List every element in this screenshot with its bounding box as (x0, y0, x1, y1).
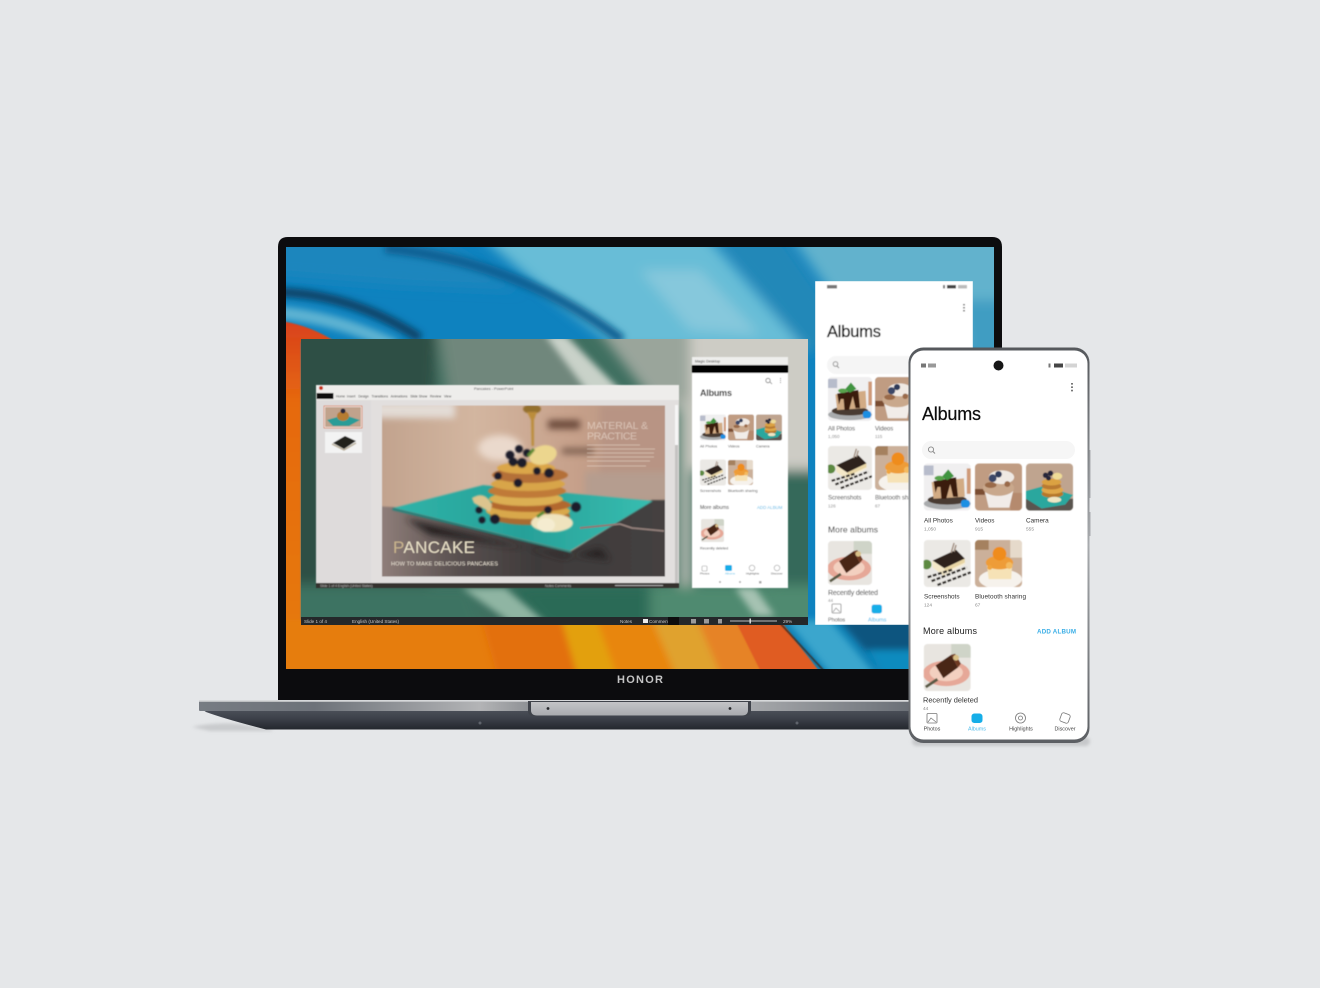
panel thumbnails (827, 376, 908, 586)
panel tab bar: Photos (828, 618, 845, 624)
mirrored tab bar: Albums (725, 572, 736, 576)
panel labels: Screenshots (828, 496, 861, 502)
slide heading right (587, 422, 648, 440)
desktop status bar: English (United States) (352, 619, 399, 624)
mirrored labels: Camera (756, 444, 770, 448)
mirrored labels: Videos (728, 444, 740, 448)
mirrored labels (700, 444, 783, 550)
brand logo: HONOR (617, 674, 663, 686)
table (372, 500, 670, 580)
phone thumbnails (922, 464, 1073, 691)
laptop base (199, 700, 911, 730)
panel labels: 126 (828, 504, 836, 508)
ppt status bar: Notes Comments (545, 584, 571, 588)
slide heading right: PRACTICE (587, 430, 637, 442)
panel labels: More albums (828, 524, 878, 534)
phone labels: 44 (923, 706, 929, 712)
mirrored phone window (692, 357, 788, 588)
panel heading: Albums (827, 323, 881, 341)
panel labels: 115 (875, 434, 883, 439)
phone labels: ADD ALBUM (1037, 628, 1076, 636)
desktop status bar (301, 617, 808, 625)
mirrored tab bar: Photos (700, 572, 710, 576)
laptop screen wallpaper (286, 247, 994, 669)
panel tab bar: Albums (868, 618, 887, 624)
panel labels: Videos (875, 426, 893, 432)
mirrored thumbnails (699, 414, 782, 542)
slide title: PANCAKE (393, 538, 475, 557)
mirrored tab bar: Highlights (746, 572, 760, 576)
panel labels: 67 (875, 504, 881, 508)
ribbon: Pancakes - PowerPoint (474, 387, 514, 391)
syrup (523, 404, 541, 446)
laptop lid and bezel (278, 237, 1002, 700)
mirrored labels: More albums (700, 505, 729, 511)
phone labels: 915 (975, 526, 983, 532)
mirrored labels: Screenshots (700, 489, 721, 493)
panel status bar (827, 285, 967, 288)
phone tab bar (924, 712, 1076, 732)
pancake stack (472, 442, 581, 532)
desktop status bar: Comments (649, 619, 672, 624)
phone shadow (912, 737, 1090, 746)
phone labels (923, 518, 1076, 712)
phone menu dots (1071, 383, 1073, 392)
phone labels: More albums (923, 626, 978, 636)
thumbnail pane (316, 400, 371, 583)
phone labels: Recently deleted (923, 696, 978, 704)
panel labels: Recently deleted (828, 590, 878, 597)
panel tab bar (828, 604, 887, 624)
phone tab bar: Highlights (1009, 726, 1033, 732)
phone labels: 1,050 (924, 526, 936, 532)
slide heading right: MATERIAL & (587, 420, 648, 432)
phone labels: 67 (975, 602, 981, 608)
powerpoint window (316, 385, 679, 588)
side buttons (1088, 450, 1090, 498)
slide (372, 402, 670, 580)
screen albums panel (815, 281, 973, 625)
desktop status bar: Slide 1 of 4 (304, 619, 327, 624)
panel labels: Bluetooth sharing (875, 496, 922, 502)
mirrored heading: Albums (700, 388, 732, 398)
panel menu dots (963, 304, 965, 312)
panel labels: 44 (828, 598, 834, 603)
window title bar (692, 357, 788, 373)
mirrored labels: ADD ALBUM (757, 505, 783, 510)
ppt status bar (316, 583, 679, 588)
toolbar icons (766, 378, 772, 384)
panel labels (828, 425, 908, 602)
bottom colour bands (300, 619, 875, 669)
slide: HOW TO MAKE DELICIOUS PANCAKES (391, 562, 498, 568)
mirrored labels: Bluetooth sharing (728, 489, 758, 493)
left orange strip (286, 320, 333, 621)
laptop (192, 237, 1002, 731)
scrollbar (675, 405, 678, 445)
phone tab bar: Discover (1055, 726, 1076, 732)
blueberries (476, 445, 581, 524)
panel search bar (828, 356, 910, 374)
phone tab bar: Albums (968, 726, 986, 732)
phone body (908, 348, 1090, 743)
phone search bar (922, 441, 1075, 459)
desktop window (301, 339, 808, 625)
phone labels: All Photos (924, 518, 953, 524)
mirrored labels: Recently deleted (700, 546, 728, 550)
phone (908, 348, 1090, 746)
camera hole (994, 360, 1004, 370)
phone labels: Videos (975, 518, 994, 524)
ribbon: Home Insert Design Transitions Animations Slide Show Review View (336, 394, 452, 398)
fork (580, 524, 664, 531)
mirrored tab bar (700, 565, 783, 584)
phone status bar (921, 364, 1077, 368)
phone labels: 124 (924, 602, 932, 608)
laptop base shadow (192, 723, 272, 731)
desktop status bar: 29% (783, 619, 792, 624)
phone labels: Screenshots (924, 594, 960, 600)
phone heading: Albums (922, 404, 981, 424)
ribbon (316, 385, 679, 400)
mirrored tab bar: Discover (771, 572, 783, 576)
mirrored labels: All Photos (700, 444, 717, 448)
phone labels: 555 (1026, 526, 1034, 532)
desktop status bar: Notes (620, 619, 633, 624)
teal plate (393, 485, 653, 551)
ppt status bar: Slide 1 of 4 English (United States) (320, 584, 373, 588)
phone labels: Camera (1026, 518, 1049, 524)
panel labels: 1,050 (828, 434, 840, 439)
phone labels: Bluetooth sharing (975, 594, 1026, 600)
window title bar: Magic Desktop (695, 360, 720, 364)
phone tab bar: Photos (924, 726, 941, 732)
panel labels: All Photos (828, 426, 855, 432)
